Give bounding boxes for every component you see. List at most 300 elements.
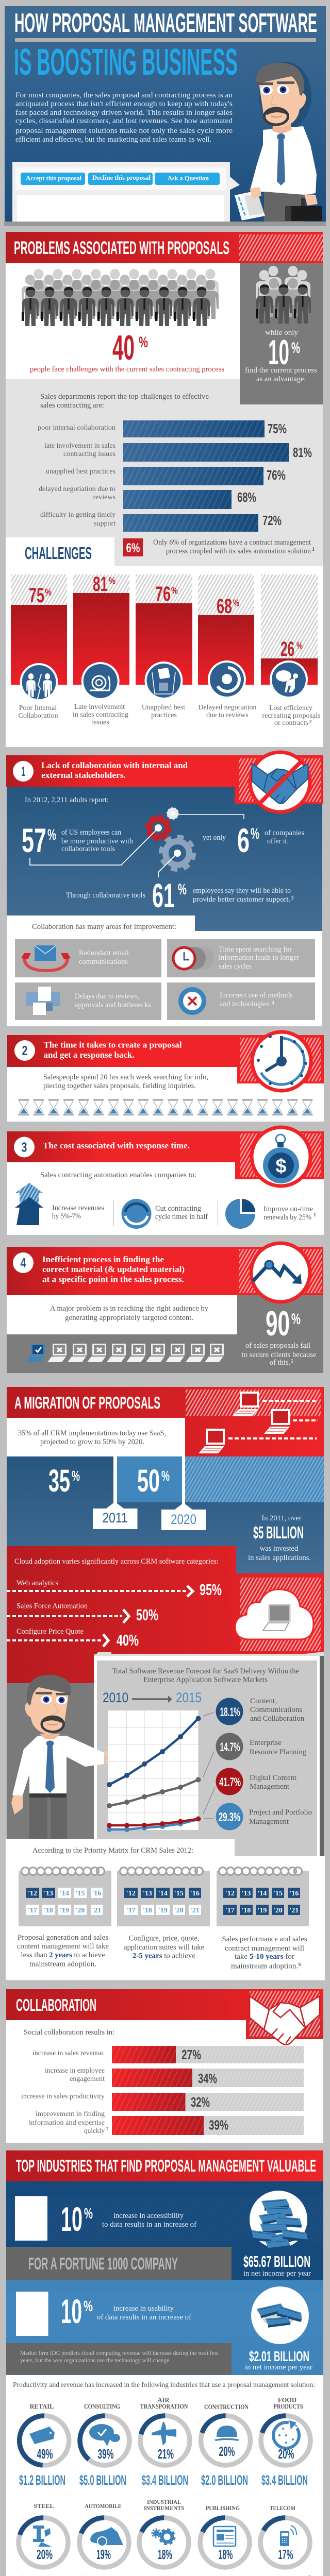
text: 5 to 10 years: mainstream adoption. [231,1962,298,1970]
panel: problems header [6,232,323,263]
icon: no handshake [250,752,310,812]
calendar: under 2 years: '16 [92,1890,101,1897]
panel: 10 percent advantage: % [291,340,300,357]
calendar: under 2 years: '15 [76,1890,85,1897]
stat: 5 billion: was invested [260,1545,299,1553]
heading: The cost associated with response time. [43,1141,190,1150]
title [14,8,317,83]
calendar: 5 to 10 years: '14 [258,1890,267,1897]
calendar: 2 to 5 years: '13 [143,1890,152,1897]
column captions: or contracts [274,719,308,727]
text: under 2 years: mainstream adoption. [29,1960,96,1968]
chart: sales force automation 50 percent [7,1602,158,1624]
icon: handshake [250,1996,320,2045]
panel: challenges bars: Sales departments report the top challenges to effective [40,393,209,401]
text: salespeople: piecing together sales proposals, fielding inquiries. [43,1082,196,1090]
panel: areas for improvement [7,916,322,1026]
industry: automobile: AUTOMOBILE [85,2502,122,2510]
stat: 40 percent: people face challenges with the current sales contracting process [30,365,224,374]
panel: 10 percent advantage: 10 [268,333,289,372]
industry: food products: PRODUCTS [273,2403,303,2410]
callout: 6 percent: 6% [126,541,140,555]
bar chart: poor internal collaboration [38,424,116,432]
calendar: 5 to 10 years: '13 [242,1890,251,1897]
heading: correct material (& updated material) [42,1264,185,1274]
intro text: cycles, dissatisfied customers, and lost revenues. See how automated [15,117,233,125]
stat: 90 percent: % [291,1311,301,1328]
stat: 10 percent usability: increase in usability [113,2304,174,2313]
bar chart: difficulty in getting timely [40,511,116,519]
panel: areas for improvement: Collaboration has many areas for improvement: [32,923,176,931]
column captions: Unapplied best [142,704,185,711]
calendar: 5 to 10 years: '16 [290,1890,299,1897]
industry: steel [12,2502,74,2576]
panel: collaboration [6,1989,323,2143]
calendar: under 2 years: '18 [44,1907,53,1914]
stat: 6 percent: of companies [265,829,304,837]
industry: retail: $1.2 BILLION [19,2472,65,2488]
bar chart: unapplied best practices [46,468,116,476]
text: salespeople [43,1073,208,1090]
icon row: laptops [26,1344,224,1362]
heading [43,1040,182,1060]
number badge [13,1252,34,1273]
column captions: 2 [309,719,311,725]
stat: 65.67 billion: in net income per year [243,2269,311,2278]
stat: 90 percent: of sales proposals fail [245,1342,310,1350]
stat: 5 billion: In 2011, over [261,1514,302,1522]
bar chart: social collaboration: improvement in finding [36,2110,105,2118]
stat: 90 percent: of this. [270,1359,290,1367]
number badge: 4 [21,1255,26,1270]
people illustration left [22,269,219,326]
industry: publishing: 18% [219,2547,233,2562]
panel: problem 3: Sales contracting automation enables companies to: [40,1171,196,1179]
column captions [19,703,321,727]
calendar: 5 to 10 years: '21 [290,1907,299,1914]
panel: hero [4,6,326,226]
column chart: 68 [217,595,232,618]
stat: 40 percent: % [139,334,148,351]
panel: challenges bars [6,379,323,566]
years arrow [103,1690,202,1705]
stat: 2.01 billion: in net income per year [245,2363,312,2371]
stat: 90 percent: 90 [266,1304,290,1343]
panel: collaboration: Social collaboration results in: [24,2028,114,2037]
bar chart: 75% [268,421,287,436]
bar chart: late involvement in sales [44,442,116,450]
industry: food products: 20% [278,2446,294,2462]
legend: project portfolio management: Management [249,1818,289,1826]
heading: at a specific point in the sales process. [42,1275,184,1284]
calendar: under 2 years: '21 [92,1907,101,1914]
text: incorrect use: Incorrect use of methods [220,991,293,999]
industry: industrial instruments: INSTRUMENTS [144,2504,184,2512]
icon: stacked documents [26,987,60,1015]
panel: migration of proposals: projected to grow to 50% by 2020. [40,1438,144,1446]
bar chart: 76% [267,467,286,483]
industry: automobile [72,2502,136,2576]
panel: chart man [7,1652,324,1856]
calendar: 5 to 10 years: '20 [273,1907,283,1914]
icon: stopwatch dollar: $ [275,1156,287,1177]
text: time spent: Time spent searching for [219,945,292,954]
column chart [11,573,318,685]
chart: configure price quote 40 percent [7,1628,139,1649]
icon: email arrows [21,945,71,971]
stat: 10 percent accessibility [61,2200,196,2238]
panel: cloud adoption [7,1546,324,1683]
year label 2011: 2011 [102,1510,128,1526]
text: improve renewals: Improve on-time [263,1205,313,1213]
chart: sales force automation 50 percent: Sales Force Automation [16,1602,88,1611]
panel: usability: Market firm IDC predicts cloud computing revenue will increase during the next few [20,2350,219,2357]
column captions: Delayed negotiation [198,704,257,711]
industry: consulting: CONSULTING [84,2403,120,2410]
callout: 6 percent: 1 [312,547,315,552]
years arrow: 2015 [176,1690,202,1705]
panel: 10 percent advantage: find the current process [245,366,317,375]
text: improve renewals [263,1205,316,1222]
icon row: hourglasses [19,1099,312,1115]
panel: challenges columns [6,537,323,747]
column captions: Late involvement [74,703,125,711]
stat: 10 percent usability: % [84,2298,93,2315]
legend: content communications: Communications [250,1706,302,1714]
column captions: due to reviews [206,711,249,719]
callout: 6 percent [123,538,315,556]
legend: digital content management: 41.7% [219,1775,241,1789]
stat: 40 percent [30,328,224,374]
bar chart: social collaboration: 34% [198,2071,217,2086]
text: incorrect use [220,991,293,1008]
icon: falling chart [251,1243,310,1302]
number badge: 2 [22,1043,28,1058]
icon: up arrows [15,1183,43,1225]
heading: The time it takes to create a proposal [43,1040,182,1050]
panel: migration of proposals: 35% of all CRM implementations today use SaaS, [18,1429,166,1437]
year label 2020 [161,1503,206,1530]
stat: 90 percent: 5 [291,1359,293,1364]
number badge: 1 [22,764,25,779]
text: 5 to 10 years [222,1935,307,1970]
column captions: practices [151,711,177,719]
panel: problem 4 [7,1243,323,1373]
calendar: under 2 years: '20 [76,1907,85,1914]
calendar: 2 to 5 years: '17 [126,1907,136,1914]
legend: project portfolio management: 29.3% [219,1810,240,1824]
bar chart: social collaboration: 39% [209,2117,228,2133]
panel: challenges bars: sales contracting are: [40,401,104,410]
legend: enterprise resource planning: 14.7% [220,1740,240,1754]
bar chart: 81% [293,445,312,460]
legend: project portfolio management [216,1803,312,1830]
industry: food products [255,2397,317,2488]
stat: 65.67 billion [243,2252,311,2278]
text: time spent: information leads to longer [219,954,299,962]
text: under 2 years: Proposal generation and sales [18,1934,108,1942]
column captions: Collaboration [19,712,58,720]
panel: usability: years, but the way organizations use the technology will change. [20,2358,171,2364]
chart: web analytics 95 percent: 95% [200,1581,222,1599]
icon: person carrying sack [270,660,308,699]
speech box with buttons: Decline this proposal [92,174,151,181]
stat: 57 percent: % [47,826,56,843]
chart frame [94,1652,324,1856]
icon: money stack [251,2286,309,2344]
text: redundant email: Redundant email [79,949,129,957]
panel: problem 4: A major problem is in reaching the right audience by [50,1304,208,1313]
icon: trash with checks [144,662,183,700]
column captions: issues [92,719,109,726]
column chart: % [109,576,116,587]
text: 5 to 10 years: Sales performance and sales [222,1935,307,1943]
calendar: 5 to 10 years: '15 [273,1890,283,1897]
icon: cycle [122,1199,152,1229]
text: cut contracting [155,1205,208,1221]
industry: retail [18,2403,71,2488]
industry: air transporation: AIR [158,2397,170,2404]
panel: 40 percent [6,263,240,379]
calendar: under 2 years: '12 [28,1890,37,1897]
bar chart: reviews [93,494,116,501]
column chart: % [171,586,178,597]
icon: stopwatch dollar [252,1127,310,1186]
calendar: 2 to 5 years [117,1867,210,1926]
icon: pie chart [225,1199,255,1229]
calendar: 2 to 5 years: '20 [174,1907,184,1914]
text: salespeople: Salespeople spend 20 hrs each week searching for info, [43,1073,208,1081]
stats: 35 and 50 percent [48,1463,170,1498]
stat: 10 percent accessibility: increase in accessibility [113,2212,184,2220]
icon: clock motion [173,947,214,970]
stat: 6 percent: offer it. [267,837,289,845]
stat: 10 percent accessibility: % [84,2206,93,2222]
number badge [14,1137,35,1157]
text: 5 to 10 years: contract management will [225,1944,304,1953]
bar chart: contracting issues [63,450,116,458]
calendar: under 2 years: '14 [60,1890,69,1897]
panel: migration of proposals [7,1387,324,1573]
bar chart: 72% [262,513,282,528]
industry: air transporation: 21% [158,2446,174,2462]
stat: 57 percent: of US employees can [61,828,122,837]
text: 2 to 5 years [124,1934,204,1960]
stat: 6 percent: % [251,825,259,842]
stat: 61 percent: Through collaborative tools [66,891,145,900]
stat: 57 percent [22,821,134,859]
text: delays: Delays due to reviews, [75,992,139,1001]
industry: industrial instruments: 18% [158,2547,172,2562]
number badge [13,761,34,782]
heading: and get a response back. [43,1050,134,1060]
businessman presenting [11,1675,171,1839]
column chart: 81 [93,573,108,596]
icon: clock with arrow [208,660,246,699]
speech box with buttons [12,162,240,222]
industry: industrial instruments: INDUSTRIAL [147,2498,181,2505]
industry: air transporation: TRANSPORATION [140,2403,188,2410]
gears diagram [30,808,244,877]
industry: food products: FOOD [278,2397,296,2404]
column captions: Lost efficiency [269,704,312,712]
stat: 6 percent: 6 [237,821,250,859]
column chart: % [296,641,303,652]
icon: clock [252,1032,311,1091]
panel: industries [6,2375,323,2576]
bar chart: social collaboration: information and expertise [29,2119,105,2127]
legend: content communications [216,1697,304,1725]
calendar: 2 to 5 years: '16 [190,1890,200,1897]
bar chart: support [94,520,116,528]
industry: construction: $2.0 BILLION [201,2472,248,2488]
heading: external stakeholders. [41,770,126,780]
calendar: 5 to 10 years: '18 [242,1907,251,1914]
calendar: 2 to 5 years: '18 [143,1907,152,1914]
legend: content communications: and Collaboration [250,1715,304,1723]
industry: consulting [70,2403,140,2488]
heading [41,760,188,780]
column chart: % [233,598,239,609]
stats: 35 and 50 percent: 50 [137,1463,160,1498]
heading: COLLABORATION [16,1995,96,2014]
bar chart [38,420,312,532]
industry: consulting: 39% [98,2446,113,2462]
panel: accessibility [6,2181,323,2280]
intro text: efficient and effective, but the marketing and sales teams as well. [15,135,211,144]
businessman [235,62,322,222]
calendar: 2 to 5 years: '19 [158,1907,168,1914]
stat: 61 percent: 61 [152,876,175,914]
bar chart: 68% [237,489,256,505]
text: delays [75,992,151,1009]
stat: 6 percent: yet only [203,834,226,842]
industry: steel: STEEL [34,2502,54,2510]
icon: broken collaboration [20,663,58,701]
industry: construction: CONSTRUCTION [204,2403,249,2411]
text: incorrect use: and technologies [220,1000,269,1008]
stats: 35 and 50 percent: % [72,1468,80,1484]
bar chart: social collaboration: increase in employee [45,2067,105,2075]
years arrow: 2010 [103,1690,128,1705]
industry: automobile: 19% [96,2547,111,2562]
text: 2 to 5 years: application suites will take [124,1943,204,1952]
bar chart: social collaboration: increase in sales productivity [21,2093,105,2100]
heading [42,1255,185,1284]
column chart: 26 [280,638,294,660]
stat: 5 billion: in sales applications. [248,1554,311,1562]
calendar: under 2 years: '19 [60,1907,69,1914]
heading: challenges: CHALLENGES [25,544,92,563]
chart title: Total Software Revenue Forecast for SaaS Delivery Within the [112,1667,299,1675]
industry: steel: 20% [37,2547,53,2562]
text: increase revenues: Increase revenues [52,1204,104,1212]
legend: project portfolio management: Project and Portfolio [249,1808,312,1817]
chart: web analytics 95 percent: Web analytics [16,1579,58,1587]
column captions: recreating proposals [262,712,321,720]
icon: money pile [250,2191,309,2250]
industry: telecom: 17% [278,2547,293,2562]
text: increase revenues [52,1204,104,1221]
number badge: 3 [22,1140,27,1155]
stat: 10 percent accessibility: 10 [61,2200,82,2238]
stat: 6 percent [203,821,304,859]
stat: 10 percent usability: 10 [61,2292,82,2330]
number badge [14,1040,35,1061]
industry: construction [194,2403,257,2488]
panel: top industries header [6,2150,323,2181]
year label 2011 [93,1502,137,1529]
callout: 6 percent: Only 6% of organizations have a contract management [153,538,311,547]
column captions: Poor Internal [19,704,57,712]
legend: content communications: 18.1% [220,1705,240,1719]
industry: telecom [252,2504,319,2576]
text: improve renewals: renewals by 25% [263,1213,311,1222]
stats: 35 and 50 percent: 35 [48,1463,70,1498]
callout: 6 percent: process coupled with its sales automation solution [166,547,311,555]
calendar: 5 to 10 years [217,1867,309,1926]
industry: retail: 49% [37,2446,53,2462]
calendar: 5 to 10 years: '12 [225,1890,235,1897]
panel: usability [6,2280,323,2375]
icon: laptops migrating [199,1392,318,1453]
line chart [107,1710,215,1832]
chart: sales force automation 50 percent: 50% [136,1606,158,1624]
industry: consulting: $5.0 BILLION [79,2472,126,2488]
intro text: antiquated process that isn't efficient enough to keep up with today's [15,100,233,108]
stat: 10 percent usability: of data results in an increase of [97,2313,191,2321]
chart: configure price quote 40 percent: Configure Price Quote [16,1628,84,1636]
stat: 57 percent: 57 [22,821,46,859]
panel: problem 1: In 2012, 2,211 adults report: [25,796,109,804]
bar chart: social collaboration: 7 [106,2126,109,2131]
legend: digital content management [216,1768,297,1795]
stat: 10 percent accessibility: to data results in an increase of [102,2221,196,2229]
stat: 90 percent [241,1304,317,1367]
industry: construction: 20% [219,2444,235,2459]
panel: 10 percent advantage: while only [265,329,298,337]
stat: 10 percent usability [61,2292,191,2330]
text: redundant email [79,949,129,966]
legend: digital content management: Management [250,1783,290,1791]
stat: 2.01 billion [245,2348,312,2371]
industry: industrial instruments [131,2498,197,2576]
icon: cloud laptop [235,1589,314,1639]
chart: web analytics 95 percent [7,1579,222,1599]
stat: 61 percent: % [178,881,187,898]
year label 2020: 2020 [171,1512,196,1527]
heading: A MIGRATION OF PROPOSALS [14,1393,160,1412]
text: increase revenues: by 5%-7% [52,1212,81,1221]
bar chart: social collaboration: 32% [191,2094,210,2110]
column chart: 75 [29,584,44,607]
panel: 10 percent advantage: as an advantage. [256,375,306,383]
stat: 57 percent: collaborative tools [61,845,115,853]
intro text: fast paced and technology driven world. This results in longer sales [15,109,233,117]
legend: enterprise resource planning [216,1733,306,1760]
industry: air transporation: $3.4 BILLION [142,2472,188,2488]
calendar: under 2 years: '17 [28,1907,37,1914]
stat: 5 billion [248,1514,311,1562]
text: time spent [219,945,299,971]
intro text [15,91,233,144]
stat: 61 percent: 3 [291,895,294,901]
panel: problem 1 [6,752,323,931]
text: delays: approvals and bottlenecks [75,1001,151,1009]
panel: 10 percent advantage [240,263,323,404]
panel: problem 3 [7,1127,324,1235]
calendar: 2 to 5 years: '14 [158,1890,168,1897]
